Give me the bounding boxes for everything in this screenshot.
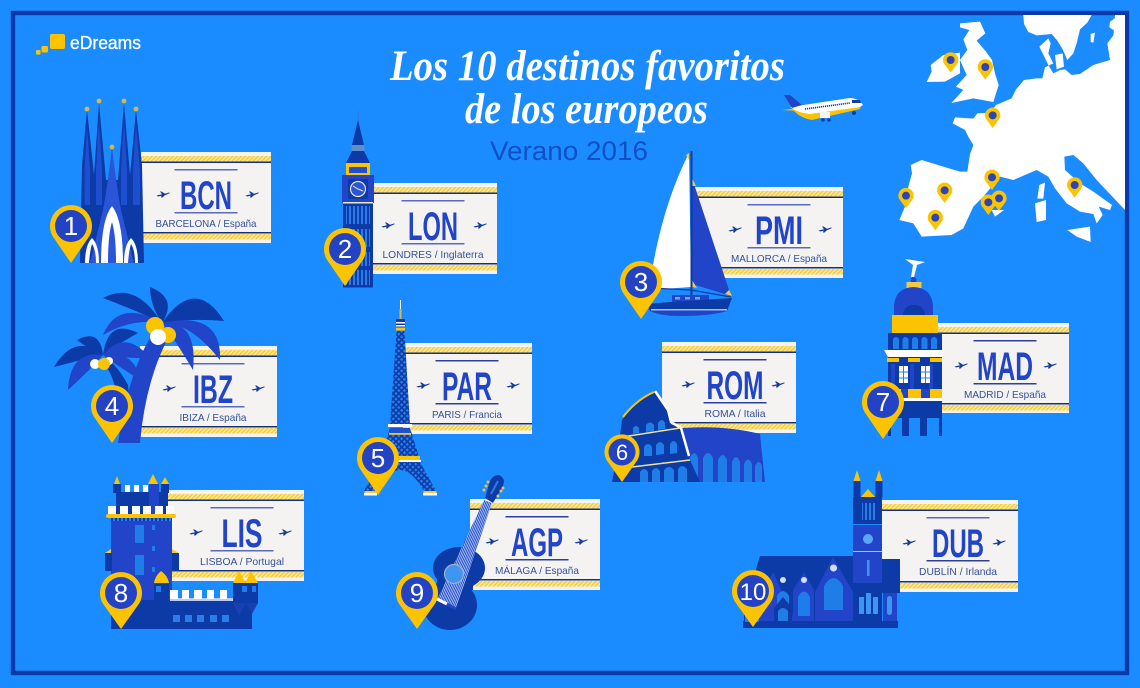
ticket: MAD: MAD — [977, 345, 1033, 389]
ticket: AGP: MÁLAGA / España — [495, 564, 579, 577]
ticket: LIS: LISBOA / Portugal — [200, 556, 284, 568]
pin 5 — [357, 437, 399, 495]
icon: guitar — [423, 475, 504, 630]
map pins — [898, 52, 1082, 230]
panel: 5 Paris — [357, 300, 532, 496]
logo: eDreams — [36, 33, 141, 55]
pin 3: 3 — [634, 267, 648, 297]
icon: Metropolis building Madrid — [884, 259, 944, 436]
ticket: BCN: BCN — [180, 174, 232, 218]
pin 1: 1 — [64, 211, 78, 241]
ticket: LIS — [166, 490, 304, 581]
pin 6 — [604, 434, 640, 482]
title: de los europeos — [465, 86, 708, 133]
ticket: LON: LON — [408, 205, 458, 249]
icon: Big Ben — [342, 111, 374, 288]
ticket: PMI — [695, 187, 843, 278]
ticket: ROM: ROM — [706, 364, 764, 408]
icon: Eiffel Tower — [364, 300, 437, 496]
logo: eDreams: eDreams — [70, 33, 141, 53]
pin 6: 6 — [616, 440, 628, 465]
pin 10: 10 — [740, 579, 766, 606]
icon: sailboat — [647, 151, 732, 316]
panel: 1 Barcelona — [50, 99, 271, 263]
panel: 9 Malaga — [396, 475, 600, 630]
pin 4: 4 — [105, 391, 119, 421]
pin 7 — [862, 381, 904, 439]
ticket: MAD — [938, 323, 1069, 413]
icon: Dublin church — [743, 470, 900, 628]
ticket: IBZ — [140, 346, 277, 437]
pin 5: 5 — [371, 443, 385, 473]
panel: 7 Madrid — [862, 259, 1069, 439]
panel: 6 Roma — [604, 342, 796, 482]
ticket: ROM: ROMA / Italia — [704, 408, 766, 420]
panel: 3 Mallorca — [620, 151, 843, 319]
subtitle: Verano 2016 — [490, 136, 648, 166]
ticket: ROM — [662, 342, 796, 433]
pin 1 — [50, 205, 92, 263]
pin 9 — [396, 572, 438, 629]
ticket: BCN: BARCELONA / España — [156, 218, 257, 230]
panel: 4 Ibiza — [54, 287, 277, 443]
icon: palm trees — [54, 287, 224, 443]
ticket: DUB — [882, 500, 1018, 592]
ticket: PMI: PMI — [755, 209, 803, 253]
ticket: MAD: MADRID / España — [964, 389, 1046, 401]
ticket: BCN — [141, 152, 271, 243]
ticket: LON: LONDRES / Inglaterra — [382, 249, 484, 261]
ticket: PMI: MALLORCA / España — [731, 253, 827, 265]
panel: 8 Lisboa — [100, 474, 304, 629]
panel: 10 Dublin — [732, 470, 1018, 628]
title: Los 10 destinos favoritos — [389, 43, 785, 90]
ticket: PAR: PARIS / Francia — [432, 409, 502, 421]
icon: airplane — [782, 95, 863, 122]
ticket: AGP — [470, 499, 600, 590]
ticket: AGP: AGP — [511, 521, 563, 565]
pin 2 — [324, 228, 366, 286]
icon: Sagrada Familia — [80, 99, 144, 263]
ticket: LIS: LIS — [222, 512, 262, 556]
pin 2: 2 — [338, 234, 352, 264]
pin 8: 8 — [114, 578, 128, 608]
ticket: PAR — [403, 343, 532, 434]
pin 8 — [100, 572, 142, 629]
ticket: IBZ: IBIZA / España — [180, 412, 247, 424]
pin 3 — [620, 261, 662, 319]
icon: Belem Tower — [105, 474, 258, 629]
ticket: LON — [373, 183, 497, 274]
ticket: PAR: PAR — [442, 365, 492, 409]
ticket: DUB: DUBLÍN / Irlanda — [919, 565, 997, 578]
ticket: DUB: DUB — [932, 522, 984, 566]
pin 7: 7 — [876, 387, 890, 417]
pin 4 — [91, 385, 133, 443]
panel: 2 Londres — [324, 111, 497, 288]
pin 9: 9 — [410, 578, 424, 608]
ticket: IBZ: IBZ — [193, 368, 233, 412]
icon: Colosseum — [612, 391, 765, 482]
pin 10 — [732, 570, 774, 627]
map of Europe — [898, 15, 1125, 242]
title — [389, 43, 785, 133]
